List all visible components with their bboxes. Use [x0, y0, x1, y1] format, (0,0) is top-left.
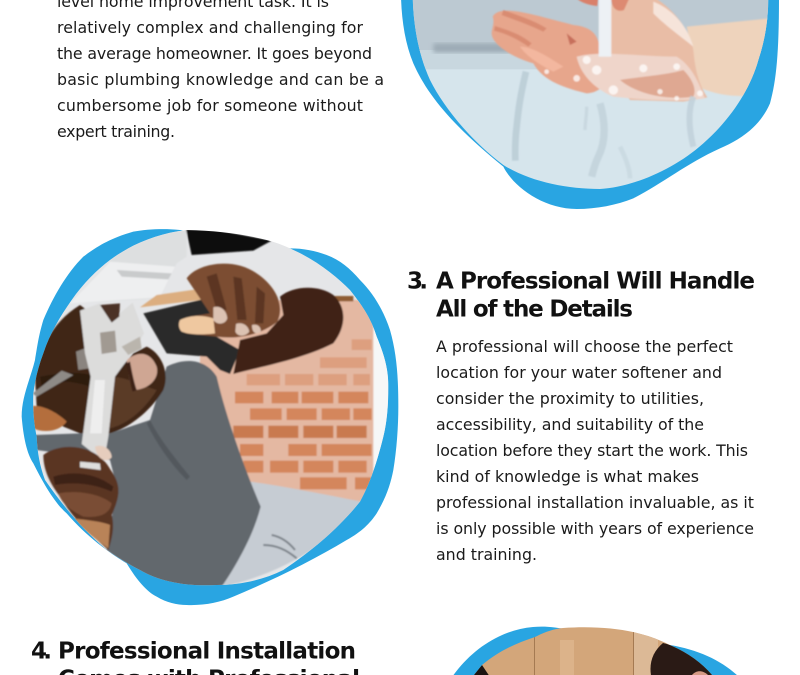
heading: item 3: A Professional Will Handle: [436, 268, 755, 294]
foam on wrist: [653, 2, 693, 47]
panel: item 2 body text: [57, 0, 384, 141]
shirt: [35, 361, 261, 587]
heading: item 3: All of the Details: [436, 296, 633, 322]
panel: item 3 body text: location before they start the work. This: [436, 441, 748, 460]
top fingers: [575, 0, 598, 6]
heading: item 4: Professional Installation: [58, 638, 356, 664]
drips: [515, 72, 526, 161]
panel: item 3 body text: consider the proximity to utilities,: [436, 389, 704, 408]
sink: [70, 230, 187, 303]
heading: item 4: [31, 638, 360, 675]
tan shelf: [140, 289, 201, 308]
panel: item 3 body text: A professional will choose the perfect: [436, 337, 733, 356]
forearm: [233, 288, 343, 374]
panel: item 3 body text: and training.: [436, 545, 537, 564]
panel: item 2 body text: cumbersome job for someone without: [57, 96, 363, 115]
panel: item 3 body text: is only possible with years of experience: [436, 519, 754, 538]
black sleeve: [143, 298, 240, 374]
water stream: [599, 0, 611, 57]
lower hand: [43, 447, 118, 550]
ear: [33, 406, 67, 431]
brick wall: [200, 300, 373, 503]
installers photo: [474, 627, 712, 675]
blue blob behind hands: [401, 0, 779, 209]
panel: item 2 body text: basic plumbing knowledge and can be a: [57, 70, 384, 89]
right hand: [600, 0, 707, 102]
panel: item 3 body text: location for your water softener and: [436, 363, 722, 382]
lips: [127, 354, 157, 390]
wrench: [80, 303, 144, 462]
panel: item 3 body text: accessibility, and suitability of the: [436, 415, 704, 434]
arm: [687, 18, 770, 96]
blue blob behind plumber: [22, 229, 398, 605]
hands photo: [400, 0, 780, 197]
white edge right of wall: [372, 326, 388, 473]
foam: [577, 54, 705, 100]
trousers: [213, 482, 362, 587]
panel: item 3 body text: [436, 337, 754, 564]
top hand: [181, 264, 280, 338]
heading: item 4: 4.: [31, 638, 52, 664]
image: plumber with wrench in blue blob: [20, 227, 400, 605]
glasses: [33, 371, 73, 397]
panel: item 2 body text: the average homeowner. It goes beyond: [57, 44, 372, 63]
plumber photo: [20, 227, 400, 590]
panel: item 2 body text: relatively complex and challenging for: [57, 18, 364, 37]
panel: item 2 body text: expert training.: [57, 122, 175, 141]
head: [35, 305, 166, 433]
blue blob behind installers: [450, 627, 742, 675]
image: installers under wooden wall in blue blob: [454, 626, 737, 675]
heading: item 3: [407, 268, 755, 322]
left hand: [491, 10, 600, 94]
black fixture: [186, 229, 272, 255]
panel: item 3 body text: professional installation invaluable, as it: [436, 493, 754, 512]
image: hands under running water in blue blob: [400, 0, 780, 209]
heading: item 3: 3.: [407, 268, 428, 294]
panel: item 3 body text: kind of knowledge is what makes: [436, 467, 699, 486]
